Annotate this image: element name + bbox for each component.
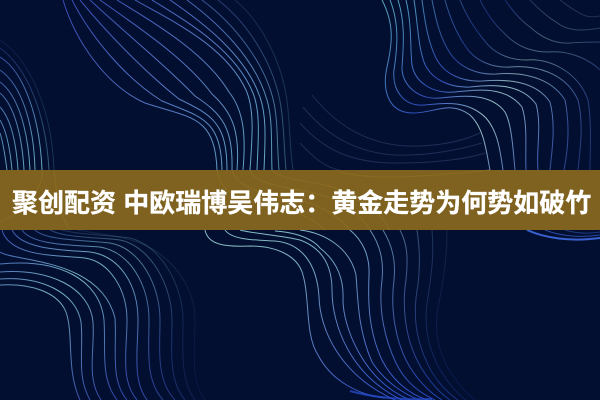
title: 聚创配资 中欧瑞博吴伟志：黄金走势为何势如破竹 [12,188,591,218]
title band [0,170,600,230]
wave family: left edge [0,40,54,170]
glow: bottom blue convergence [350,391,432,399]
wave family: lower centre [205,230,475,400]
wave family: top centre [63,0,293,170]
wave family: lower right corner [527,230,600,240]
wave family: arcs behind band [0,170,490,230]
wave family: top right [382,0,600,170]
wave family: faint arcs before band [300,95,485,170]
wave family: lower left [0,230,205,400]
